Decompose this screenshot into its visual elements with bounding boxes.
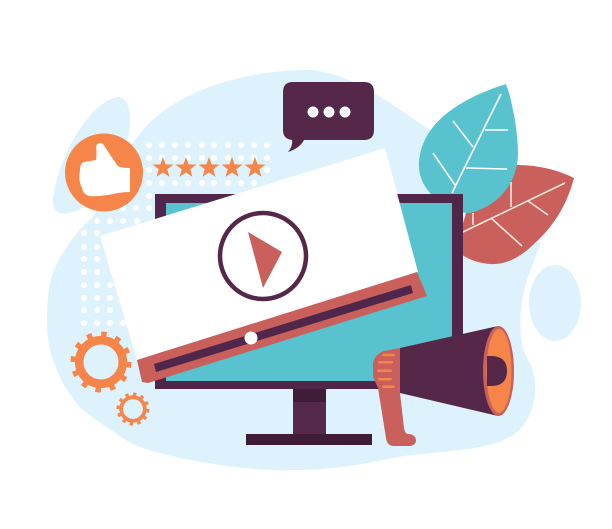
progress track	[154, 285, 413, 372]
monitor base	[246, 434, 372, 445]
bell interior	[486, 329, 512, 413]
bell rim	[483, 326, 514, 416]
speaker	[487, 356, 507, 386]
icon: large gear	[73, 334, 129, 390]
progress knob	[244, 332, 258, 344]
monitor	[155, 194, 463, 445]
rating stars	[152, 157, 266, 177]
icon: thumbs up badge	[65, 134, 143, 212]
icon: small gear	[118, 394, 148, 424]
monitor screen	[166, 203, 452, 381]
megaphone cone	[400, 326, 498, 416]
play button ring	[220, 213, 306, 299]
icon: megaphone	[373, 326, 514, 446]
megaphone handle	[373, 348, 416, 446]
icon: speech bubble	[283, 82, 374, 152]
play triangle	[248, 232, 282, 288]
monitor stand	[293, 388, 326, 434]
player control bar	[137, 272, 427, 383]
background blobs	[47, 70, 581, 470]
card body	[100, 148, 418, 360]
monitor frame	[155, 194, 463, 389]
video player card	[100, 148, 427, 383]
dot pattern	[81, 142, 270, 326]
icon: teal leaf	[419, 84, 518, 213]
icon: red leaf	[455, 165, 574, 264]
handle grip stripes	[377, 354, 395, 388]
